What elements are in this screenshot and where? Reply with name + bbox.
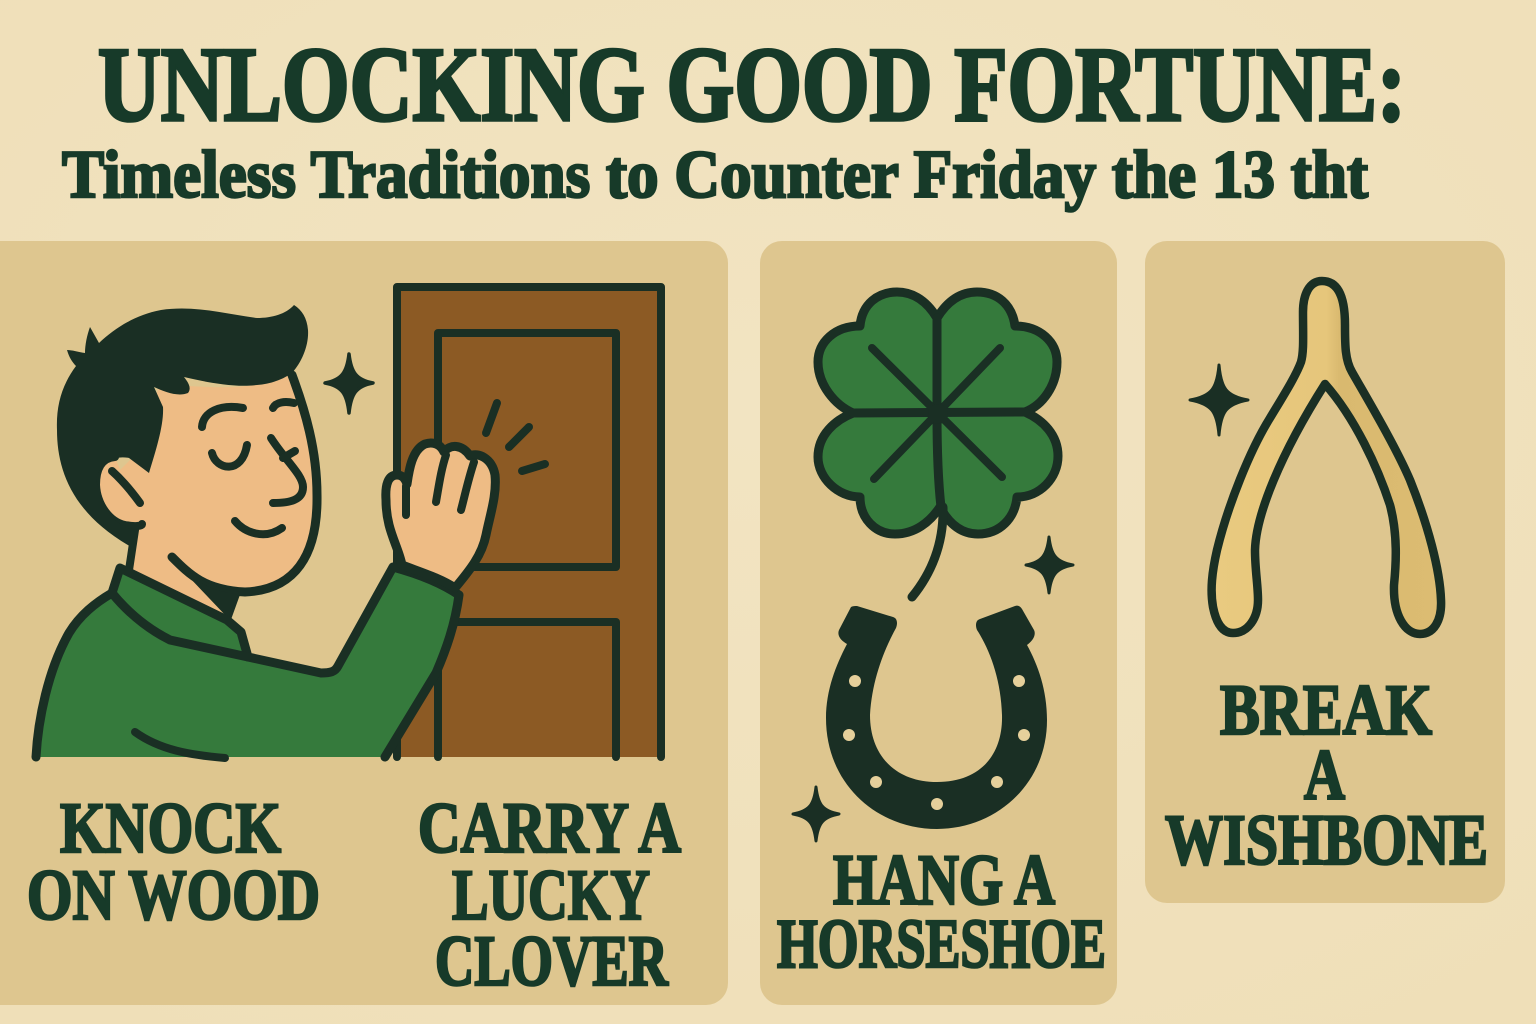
icon: horseshoe — [826, 606, 1047, 829]
icon: door — [397, 287, 661, 757]
icon: sparkle — [1190, 365, 1248, 435]
icon: four-leaf clover — [818, 292, 1058, 597]
facial features — [112, 402, 303, 534]
icon: sparkle — [1026, 537, 1073, 593]
label: carry a lucky clover: LUCKY — [452, 855, 650, 935]
icon: wishbone — [1212, 281, 1441, 634]
panel: clover and horseshoe — [760, 241, 1117, 1005]
label: carry a lucky clover: CARRY A — [418, 788, 681, 868]
hair — [57, 305, 308, 549]
label: hang a horseshoe: HORSESHOE — [777, 906, 1106, 983]
hand — [386, 443, 495, 588]
label: break a wishbone — [1165, 670, 1488, 880]
label: break a wishbone: A — [1304, 735, 1345, 815]
panel: knock on wood and lucky clover — [0, 241, 728, 1005]
label: hang a horseshoe — [777, 840, 1106, 983]
face line — [172, 375, 317, 592]
label: knock on wood — [27, 788, 320, 935]
body — [36, 567, 459, 757]
label: carry a lucky clover: CLOVER — [435, 921, 669, 1001]
label: carry a lucky clover — [418, 788, 681, 1001]
label: knock on wood: KNOCK — [60, 788, 281, 868]
icon: sparkle — [325, 354, 373, 413]
label: hang a horseshoe: HANG A — [833, 840, 1055, 920]
label: break a wishbone: BREAK — [1220, 670, 1432, 750]
subtitle: Timeless Traditions to Counter Friday the 13 tht — [62, 136, 1368, 212]
icon: knock marks — [486, 403, 545, 471]
neck and face — [100, 373, 317, 622]
panel: wishbone — [1145, 241, 1505, 903]
label: knock on wood: ON WOOD — [27, 855, 320, 935]
icon: sparkle — [793, 787, 839, 841]
icon: man knocking on the door — [36, 305, 495, 758]
